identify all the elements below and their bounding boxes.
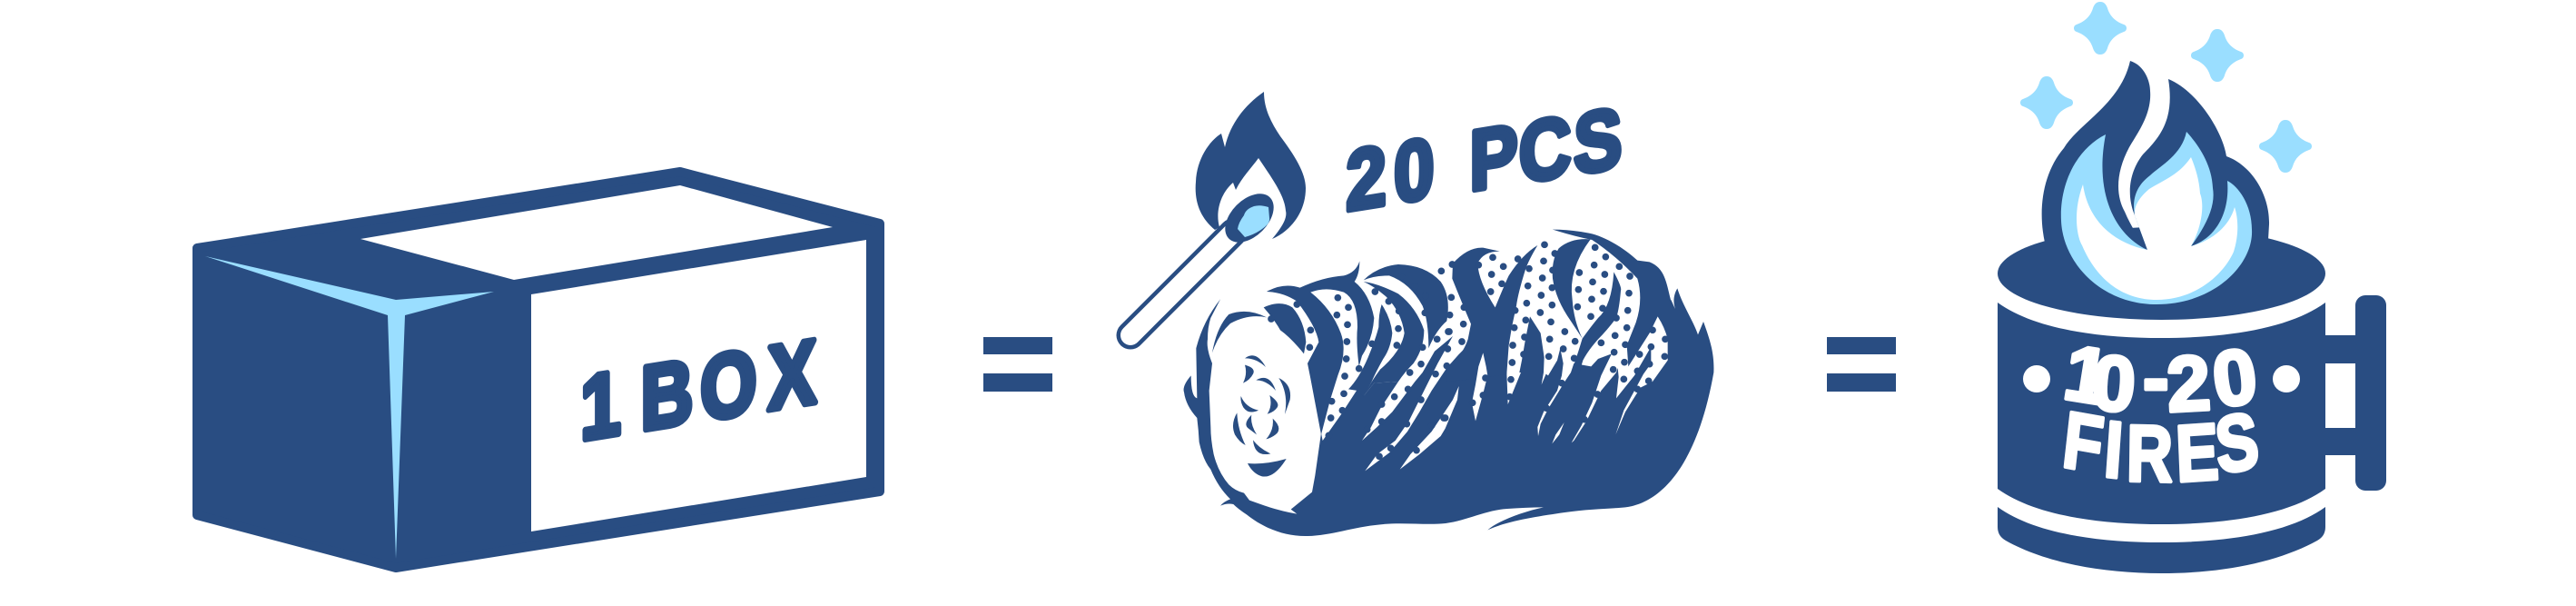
white slivers in lower log	[1400, 353, 1564, 470]
box label: 1 BOX: 1 BOX	[580, 322, 816, 460]
wood rings on log face	[1233, 355, 1290, 477]
match stick outline	[1130, 233, 1233, 335]
label: 20 PCS: 20 PCS	[1346, 89, 1622, 229]
light blue flame	[2061, 132, 2252, 304]
match head	[1216, 184, 1283, 252]
icon: bundle of burning wood	[1184, 218, 1713, 536]
bark stroke three	[1364, 282, 1424, 396]
white log face and bark field	[1208, 218, 1668, 514]
box front label face	[531, 240, 866, 531]
bark rising blade	[1573, 272, 1621, 375]
can handle	[2325, 295, 2386, 491]
log silhouette	[1184, 230, 1713, 536]
can base band	[1998, 507, 2325, 573]
bark stroke two	[1348, 304, 1392, 397]
match flame	[1196, 92, 1306, 239]
match head highlight	[1238, 205, 1269, 237]
box top face	[360, 185, 833, 280]
can label: FIRES: FIRES	[2059, 394, 2263, 499]
white flame core	[2077, 157, 2237, 300]
bark crossing stroke	[1446, 245, 1537, 382]
halftone dots	[1271, 244, 1665, 456]
blue flame	[2042, 61, 2269, 300]
bark blade	[1553, 239, 1591, 339]
can label: 10-20: 10-20	[2058, 329, 2262, 429]
can rim	[1998, 227, 2325, 320]
bark stroke four	[1364, 264, 1448, 348]
bark blob	[1264, 303, 1306, 353]
box corner highlight	[205, 256, 494, 559]
bark stroke one	[1267, 261, 1374, 434]
match stick fill	[1130, 233, 1233, 335]
icon: fire can	[1998, 61, 2386, 573]
bark arch	[1212, 312, 1267, 353]
bark strokes	[1212, 239, 1621, 434]
can body	[1998, 303, 2325, 524]
icon: cardboard box	[197, 172, 880, 568]
can label dots	[2023, 365, 2300, 392]
equals sign: box to matches	[983, 337, 1052, 392]
icon: sparkles	[2020, 2, 2312, 173]
equals sign: matches to fires	[1827, 337, 1896, 392]
box body	[197, 172, 880, 568]
icon: burning match	[1130, 92, 1306, 335]
